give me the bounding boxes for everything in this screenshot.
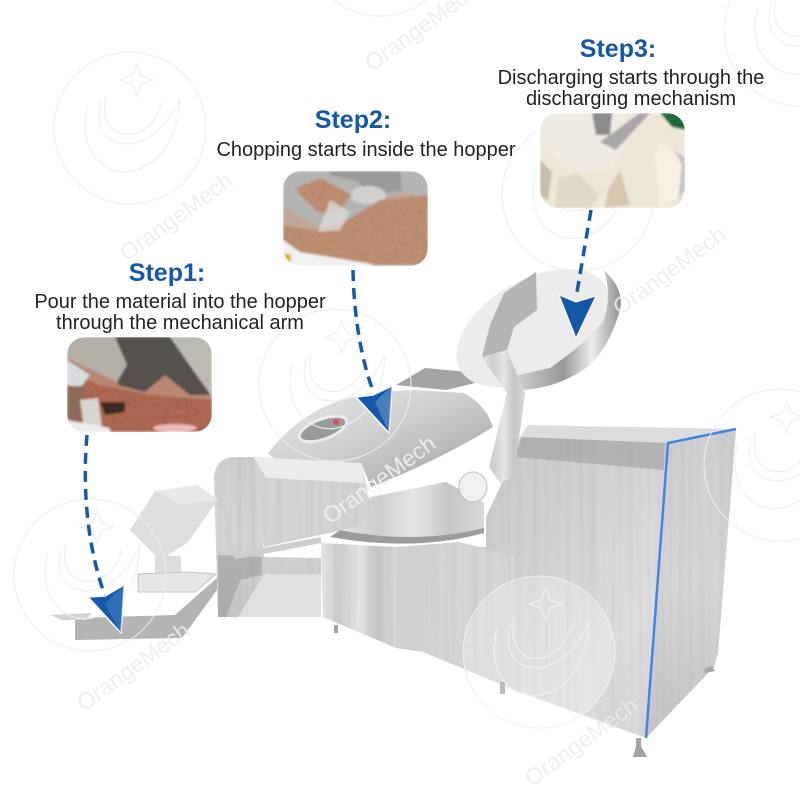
step 3 description: discharging mechanism [526, 88, 736, 110]
side chute [254, 457, 375, 547]
watermarks: OrangeMech [115, 167, 238, 266]
step 1 heading: Step1: [129, 259, 205, 287]
dark top band [516, 437, 665, 470]
lift arm [482, 350, 525, 483]
cabinet top [520, 425, 736, 443]
loading arm [75, 578, 217, 640]
side box [130, 485, 218, 560]
viewing port [296, 411, 350, 447]
dome cover [268, 390, 493, 487]
arrowhead: step 3 [559, 295, 596, 338]
arrow: step 3 dashed connector [576, 210, 591, 298]
step 1 description: through the mechanical arm [56, 312, 304, 334]
watermarks: OrangeMech [72, 617, 195, 716]
cabinet right face [646, 430, 736, 738]
watermarks: OrangeMech [318, 430, 441, 529]
blue edge trim [646, 429, 736, 738]
step 2 heading: Step2: [315, 106, 391, 134]
photo: material poured into hopper [67, 337, 212, 432]
lower centre panel [321, 543, 396, 648]
bowl [343, 482, 484, 543]
lid disk [436, 244, 630, 412]
arrow: step 1 dashed connector [85, 435, 105, 596]
step 3 description: Discharging starts through the [498, 67, 764, 89]
rear left frame [214, 457, 321, 617]
cabinet left face [421, 425, 668, 738]
pipe [219, 505, 321, 556]
hatch on dome [396, 368, 475, 390]
machine: bowl chopper [50, 244, 736, 757]
arrowhead: step 1 [88, 585, 124, 633]
pivot cap [459, 472, 487, 502]
arrow: step 2 dashed connector [353, 270, 372, 388]
arrowhead: step 2 [356, 386, 392, 433]
feet [334, 625, 715, 757]
step 2 description: Chopping starts inside the hopper [216, 139, 516, 161]
step 3 heading: Step3: [580, 35, 656, 63]
photo: chopping inside hopper [283, 171, 428, 266]
watermarks: OrangeMech [608, 221, 731, 320]
watermarks: OrangeMech [520, 692, 643, 791]
step 1 description: Pour the material into the hopper [34, 291, 326, 313]
photo: discharged product [540, 113, 685, 208]
